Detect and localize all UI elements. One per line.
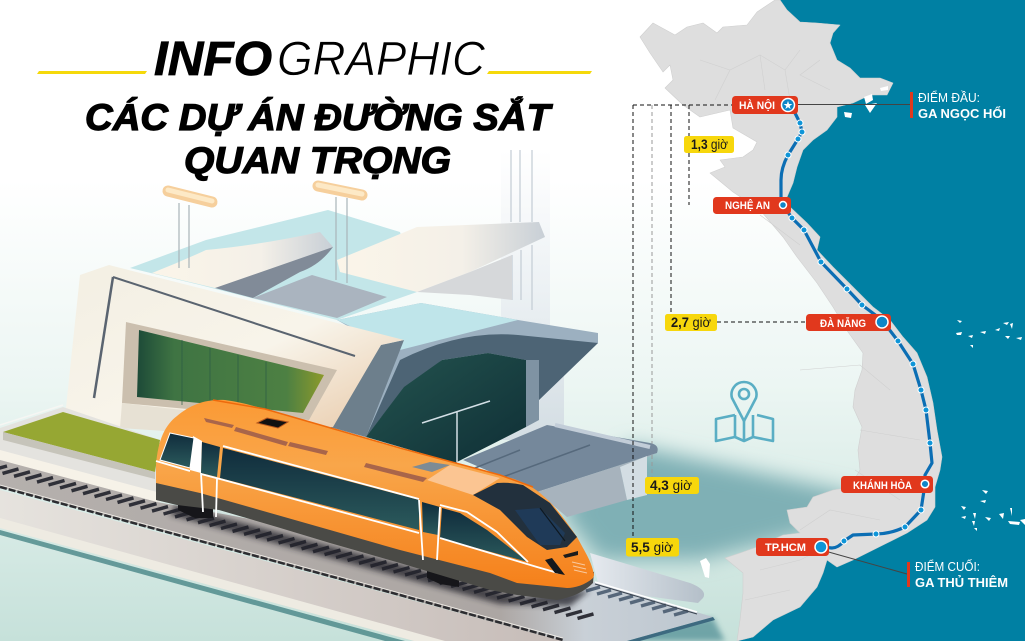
badge: 1,3 giờ: 1,3 giờ — [691, 137, 728, 152]
land — [640, 0, 942, 641]
callout: end point — [907, 559, 1008, 590]
bogies — [178, 498, 459, 587]
label: Hà Nội — [732, 96, 798, 114]
rail — [0, 487, 563, 640]
label: Khánh Hòa — [841, 476, 933, 493]
travel time badges — [626, 136, 734, 556]
shadow — [170, 505, 590, 606]
upper rail — [595, 582, 697, 612]
sleepers row — [0, 466, 594, 618]
ground shadow — [560, 445, 860, 560]
side windows — [160, 433, 194, 468]
windshield — [473, 483, 577, 550]
roof peach panel — [427, 465, 500, 495]
lower platform — [0, 490, 563, 641]
platform — [463, 425, 658, 492]
badge: 4,3 giờ — [645, 477, 699, 494]
grey side wall — [330, 340, 404, 437]
sleepers upper row — [586, 587, 688, 615]
guide over the train scene — [632, 105, 634, 540]
base outline — [0, 407, 160, 505]
cream strip — [0, 450, 157, 502]
heading: GRAPHIC — [277, 33, 485, 86]
station labels — [713, 96, 933, 556]
headlight and grille — [545, 558, 565, 575]
roof panels — [204, 418, 427, 482]
callout: end point: ĐIỂM CUỐI: — [915, 559, 980, 574]
stops — [785, 120, 933, 544]
map of Vietnam — [640, 0, 1025, 641]
light platform — [590, 553, 704, 603]
callout: start point: GA NGỌC HỔI — [918, 106, 1006, 121]
white panel — [190, 436, 202, 473]
roof white wing — [337, 222, 545, 292]
label: Đà Nẵng — [806, 314, 891, 331]
curved roof piece — [152, 232, 333, 297]
callout leader lines — [797, 104, 910, 574]
label: Hà Nội: ★ — [783, 100, 793, 110]
title rules — [37, 71, 592, 74]
badge: 2,7 giờ — [665, 314, 717, 331]
label: Hà Nội: HÀ NỘI — [739, 99, 775, 112]
orange body — [156, 400, 594, 588]
rail line — [781, 113, 932, 548]
dark roof bowl — [253, 275, 387, 318]
badge: 2,7 giờ: 2,7 giờ — [671, 315, 711, 330]
white stripes — [156, 446, 558, 573]
roof edge — [213, 400, 533, 487]
label: TP.HCM — [756, 538, 829, 556]
track bed — [0, 460, 713, 641]
bed shadow — [610, 618, 725, 641]
subtitle: CÁC DỰ ÁN ĐƯỜNG SẮT — [85, 96, 554, 138]
label: Khánh Hòa: KHÁNH HÒA — [853, 479, 912, 492]
label: Đà Nẵng: ĐÀ NẴNG — [820, 317, 866, 330]
label: TP.HCM: TP.HCM — [765, 542, 806, 554]
heading — [37, 33, 592, 181]
map pin icon — [716, 382, 773, 441]
travel time dashed guides — [633, 105, 806, 477]
province lines — [700, 50, 920, 600]
badge: 4,3 giờ: 4,3 giờ — [650, 478, 692, 493]
railway route — [781, 113, 933, 548]
opening — [122, 322, 337, 420]
roof glass — [130, 210, 417, 320]
badge: 5,5 giờ — [626, 538, 679, 556]
front frame — [65, 265, 404, 428]
label: Nghệ An: NGHỆ AN — [725, 199, 770, 212]
callout: end point: GA THỦ THIÊM — [915, 575, 1008, 590]
step — [120, 403, 200, 432]
islands — [700, 86, 1025, 578]
callout: start point: ĐIỂM ĐẦU: — [918, 90, 980, 105]
label: Nghệ An — [713, 197, 791, 214]
lawn — [3, 412, 160, 472]
green glazing — [137, 330, 324, 413]
ground and track — [0, 405, 725, 641]
dark glass facade — [366, 353, 526, 463]
badge: 5,5 giờ: 5,5 giờ — [631, 540, 673, 555]
tower — [501, 150, 564, 440]
train — [156, 400, 594, 606]
heading: QUAN TRỌNG — [184, 140, 451, 181]
dark skirt — [156, 478, 594, 600]
callout: start point — [910, 90, 1006, 121]
title: INFO — [154, 33, 272, 86]
sea — [737, 0, 1025, 641]
roof lights — [168, 185, 362, 283]
station building — [65, 150, 658, 517]
